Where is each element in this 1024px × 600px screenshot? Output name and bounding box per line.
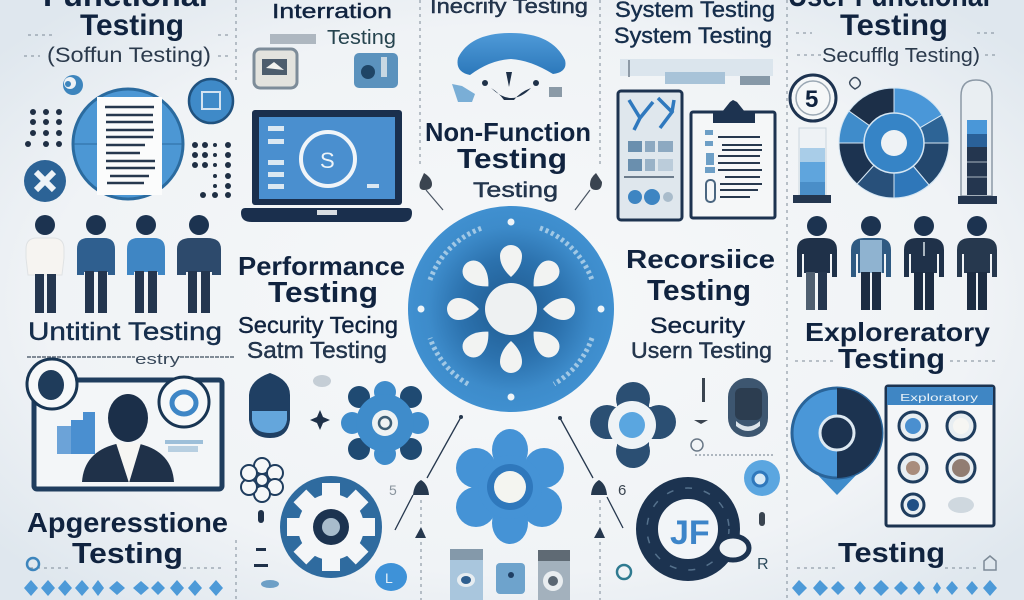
clipped bottom headings [250, 595, 735, 600]
presenter figure [82, 394, 174, 483]
subheading: security: Security Tecing [238, 312, 398, 338]
icon: blue badge [375, 563, 407, 591]
heading: regression testing: Testing [647, 275, 751, 307]
icon: small heart [850, 78, 860, 89]
icon: tablet [618, 91, 682, 220]
icon: clover [590, 382, 676, 468]
heading: acceptance testing: Apgeresstione [27, 507, 228, 538]
icon: clipboard [691, 100, 775, 218]
dot grid left [25, 109, 62, 147]
panel: usability icons [590, 378, 780, 579]
heading: functional testing [43, 0, 208, 42]
icon: small house [984, 556, 996, 570]
chart: left tube [793, 128, 831, 203]
heading: functional testing: Testing [80, 9, 184, 42]
person 3 [904, 216, 944, 310]
heading: Testing [327, 27, 396, 49]
icon: small marks [617, 378, 765, 579]
icon: smile face [452, 72, 562, 102]
heading: regression testing [626, 244, 775, 307]
person 1 [797, 216, 837, 310]
petals [447, 245, 575, 373]
dot grid right [192, 142, 231, 198]
icon: swirl [63, 75, 83, 95]
icon: screen badge [189, 79, 233, 123]
icon: large gear [280, 476, 382, 578]
heading: unit testing: Untitint Testing [28, 318, 222, 346]
icon: ring dial [647, 488, 749, 570]
heading: testing: Testing [838, 537, 945, 568]
shape: tray [165, 440, 203, 452]
pointer lines lower [395, 417, 623, 530]
panel: integration testing [241, 1, 412, 222]
panel: system testing [614, 0, 775, 220]
heading: non-function testing: Testing [473, 179, 558, 202]
panel: user functional testing [788, 0, 997, 204]
heading: Interration [272, 1, 392, 23]
subheading: security usern [631, 313, 772, 363]
chart: right tube [958, 80, 997, 204]
panel: security icons [241, 373, 429, 591]
icon: laptop: S [320, 148, 335, 173]
icon: blue flower [456, 429, 564, 544]
chart: bars [57, 412, 95, 454]
panel: app card [886, 386, 994, 526]
caption rule: estry [135, 351, 181, 368]
panel: presenter [27, 359, 222, 489]
panel: non-functional center top [420, 0, 602, 210]
person 2 [851, 216, 891, 310]
heading: acceptance testing [27, 507, 228, 570]
ring ticks [430, 228, 592, 384]
heading: performance testing: Performance [238, 251, 405, 281]
subheading: Secufflg Testing) [822, 45, 980, 67]
mark: letter: R [757, 556, 769, 573]
mark: number six: 6 [618, 482, 626, 499]
subheading: security: Satm Testing [247, 337, 387, 363]
icon: numbered badge [790, 75, 836, 121]
heading: acceptance testing: Testing [72, 538, 183, 570]
icon: numbered badge: 5 [805, 86, 818, 113]
devices row [450, 549, 570, 600]
central hub disc [408, 206, 614, 412]
icon: ring dial: JF [670, 514, 710, 552]
pin right [575, 173, 602, 210]
subheading: security usern: Usern Testing [631, 338, 772, 363]
person: white [26, 215, 64, 313]
heading: exploratory testing [805, 317, 991, 374]
icon: laptop [241, 110, 412, 222]
icon: fingerprint device [728, 378, 768, 437]
panel: functional testing [24, 0, 233, 202]
heading: non-function testing: Non-Function [425, 117, 591, 147]
ring dots [418, 218, 604, 400]
mark: number: 5 [389, 482, 397, 498]
heading: regression testing: Recorsiice [626, 244, 775, 274]
pins lower [413, 415, 607, 538]
icon: blue mushroom cap [458, 33, 566, 75]
icon: small sparkle [310, 410, 330, 430]
heading [788, 0, 990, 42]
blurred banner [620, 59, 773, 85]
person: dark blue [77, 215, 115, 313]
icon: blue badge: L [385, 570, 393, 586]
icon: outline flower [241, 458, 283, 502]
icon: blue module [354, 53, 398, 88]
icon: cross badge [24, 160, 66, 202]
dashed rule [695, 454, 775, 456]
people group right [797, 216, 997, 310]
hub center [485, 283, 537, 335]
icon: small marks [254, 510, 279, 588]
icon: gear blue [341, 381, 429, 465]
icon: blue badge [159, 377, 209, 427]
heading: exploratory testing: Exploreratory [805, 317, 991, 347]
person: navy [177, 215, 221, 313]
heading [270, 1, 396, 49]
icon: shield [249, 373, 290, 438]
heading: System Testing [614, 23, 772, 48]
icon: small lens [313, 375, 331, 387]
icon: dark badge [27, 359, 77, 409]
people group left [26, 215, 221, 313]
heading: non-function testing [425, 117, 591, 202]
icon: grey module [254, 49, 297, 88]
pin left [420, 173, 443, 210]
heading: performance testing [238, 251, 405, 309]
heading: exploratory testing: Testing [838, 343, 945, 374]
icon: blue ring badge [744, 460, 780, 496]
heading: performance testing: Testing [268, 277, 378, 309]
subheading: security [238, 312, 398, 363]
icon: map pin lens [792, 388, 882, 495]
heading [614, 0, 775, 48]
chart: radial [839, 88, 949, 198]
panel: app card: Exploratory [900, 393, 978, 404]
diamond row right [792, 580, 997, 596]
subheading: security usern: Security [650, 313, 745, 338]
icon: document in circle [73, 89, 183, 199]
person: blue [127, 215, 165, 313]
diamond row left [24, 558, 223, 596]
heading: Testing [840, 9, 948, 42]
person 4 [957, 216, 997, 310]
panel: exploratory icons [792, 386, 997, 596]
heading: non-function testing: Testing [457, 143, 567, 174]
subheading: (Soffun Testing) [47, 44, 211, 67]
